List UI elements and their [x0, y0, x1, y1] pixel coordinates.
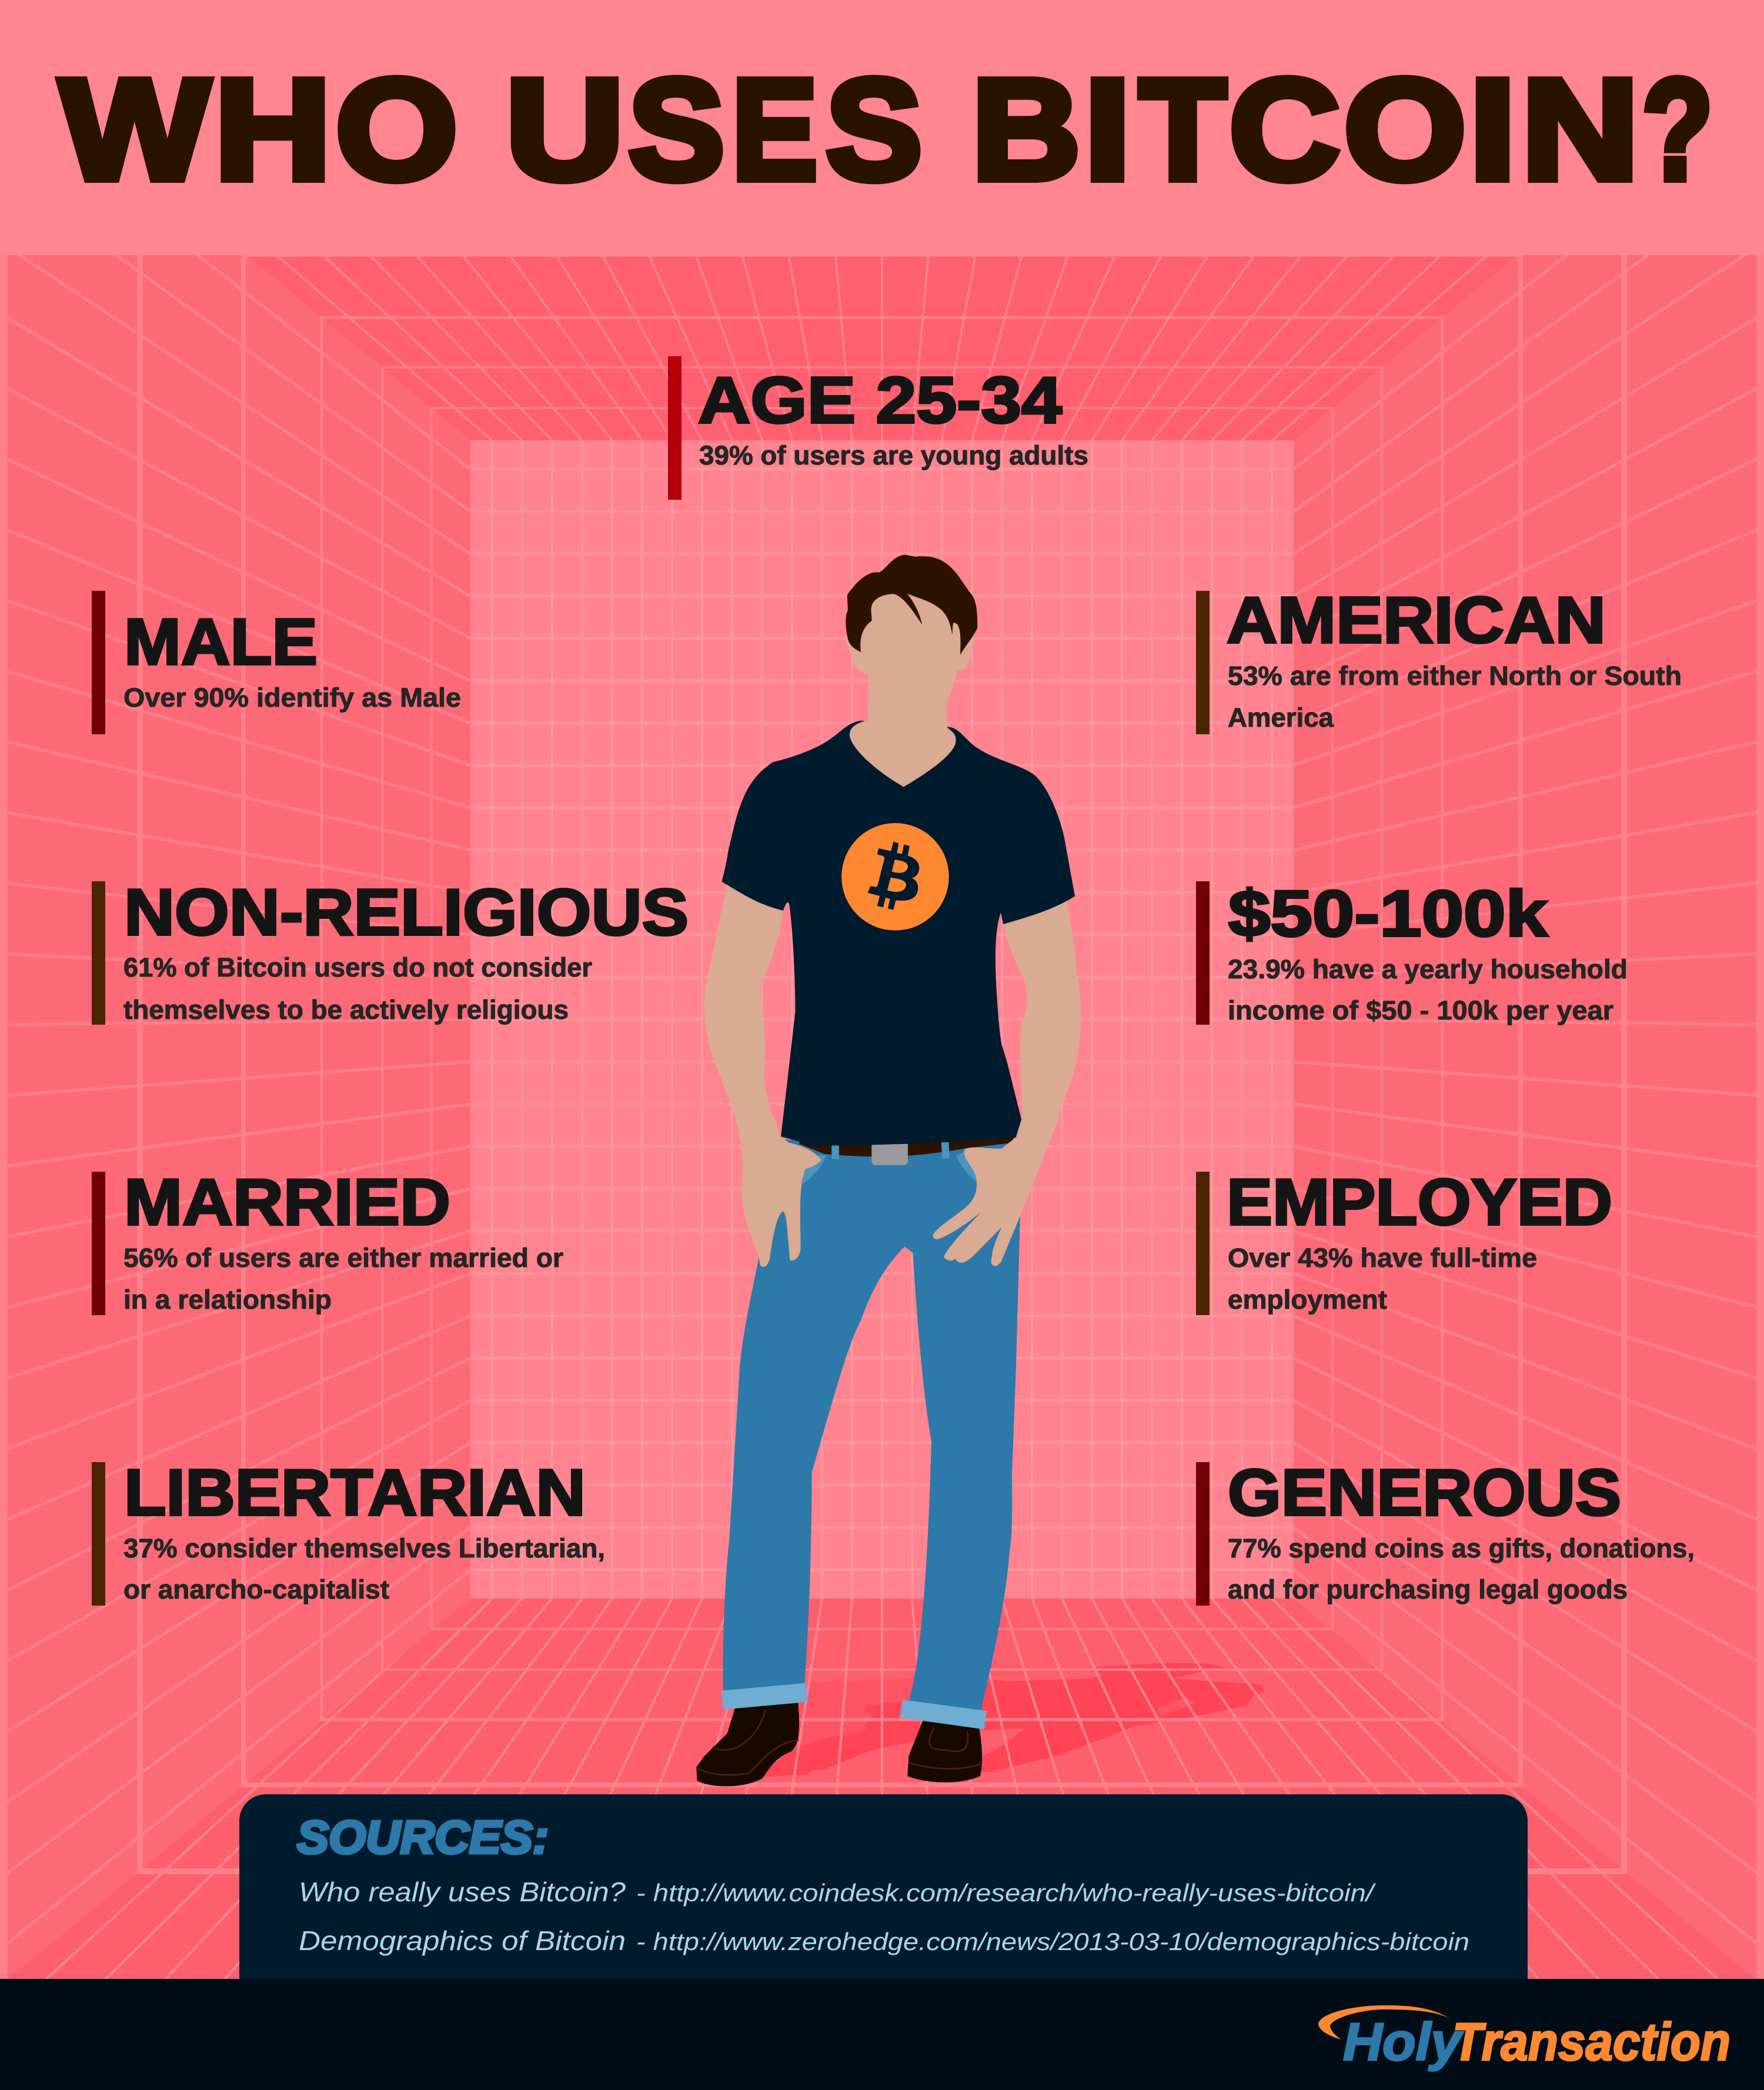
callout: employed: employment	[1228, 1285, 1387, 1315]
callout: married: in a relationship	[123, 1285, 332, 1315]
footer band	[0, 1979, 1764, 2090]
title: U	[506, 50, 624, 209]
hair	[846, 554, 977, 655]
callout: male: MALE	[124, 606, 318, 678]
callout: male: Over 90% identify as Male	[123, 683, 461, 713]
callout: employed	[1196, 1166, 1612, 1315]
callout: generous: and for purchasing legal goods	[1228, 1574, 1628, 1604]
title: C	[1230, 50, 1339, 209]
callout: married: MARRIED	[124, 1166, 450, 1239]
callout: married: 56% of users are either married or	[123, 1243, 563, 1273]
title: W	[60, 50, 210, 209]
title: H	[215, 50, 331, 209]
callout: income	[1196, 877, 1628, 1025]
callout: non-religious: NON-RELIGIOUS	[124, 876, 689, 949]
head and neck	[846, 554, 977, 787]
title: N	[1522, 50, 1639, 209]
title: E	[732, 50, 817, 209]
logo: HolyTransaction: Transaction	[1452, 2013, 1730, 2072]
callout: libertarian: or anarcho-capitalist	[123, 1574, 389, 1604]
callout: employed: EMPLOYED	[1227, 1166, 1612, 1239]
callout: american	[1196, 584, 1682, 734]
callout: male	[92, 591, 461, 734]
callout: employed: Over 43% have full-time	[1228, 1243, 1537, 1273]
callout: libertarian: LIBERTARIAN	[124, 1456, 586, 1529]
callout: generous: GENEROUS	[1228, 1456, 1621, 1529]
callout: american: 53% are from either North or South	[1228, 661, 1682, 691]
t-shirt	[722, 721, 1075, 1146]
jeans cuffs	[721, 1683, 987, 1730]
callout: age: AGE 25-34	[698, 364, 1062, 437]
callout: income: $50-100k	[1228, 877, 1548, 950]
callout: american: America	[1228, 703, 1334, 733]
callout: libertarian	[92, 1456, 605, 1606]
header band	[0, 0, 1764, 255]
title: O	[336, 50, 457, 209]
logo: HolyTransaction: Holy	[1343, 2013, 1464, 2072]
callout: income: income of $50 - 100k per year	[1228, 995, 1613, 1025]
title: S	[826, 50, 922, 209]
logo: HolyTransaction	[1318, 2005, 1730, 2072]
floor shadow	[754, 1663, 1264, 1777]
callout: married	[92, 1166, 563, 1315]
shoes	[696, 1700, 982, 1786]
title: I	[1084, 50, 1131, 209]
panel: sources	[239, 1794, 1528, 1979]
title: B	[972, 50, 1080, 209]
callout: age: 39% of users are young adults	[699, 440, 1088, 470]
panel: sources: - http://www.coindesk.com/research/who-really-uses-bitcoin/	[636, 1879, 1377, 1907]
callout: non-religious: themselves to be actively religious	[123, 995, 569, 1025]
callout: non-religious: 61% of Bitcoin users do not consider	[123, 952, 592, 982]
callout: american: AMERICAN	[1227, 584, 1606, 657]
icon: bitcoin logo on shirt	[841, 823, 949, 931]
title: I	[1469, 50, 1516, 209]
back wall	[470, 440, 1294, 1599]
hands	[736, 1117, 1060, 1267]
title: O	[1344, 50, 1466, 209]
arms	[704, 884, 1081, 1148]
title: ?	[1642, 50, 1713, 209]
callout: income: 23.9% have a yearly household	[1228, 954, 1628, 984]
callout: generous	[1196, 1456, 1695, 1606]
panel: sources: Who really uses Bitcoin?	[299, 1877, 626, 1907]
callout: generous: 77% spend coins as gifts, donations,	[1228, 1533, 1695, 1563]
panel: sources: SOURCES:	[297, 1811, 549, 1863]
callout: age	[668, 356, 1088, 500]
left half of the room	[0, 47, 883, 1987]
panel: sources: Demographics of Bitcoin	[299, 1925, 626, 1956]
callout: libertarian: 37% consider themselves Libertarian,	[123, 1533, 605, 1563]
title: T	[1140, 50, 1226, 209]
person	[696, 554, 1081, 1786]
title: S	[629, 50, 724, 209]
belt	[800, 1135, 1015, 1165]
jeans	[721, 1139, 1020, 1730]
panel: sources: - http://www.zerohedge.com/news/2013-03-10/demographics-bitcoin	[636, 1928, 1469, 1955]
callout: non-religious	[92, 876, 689, 1025]
